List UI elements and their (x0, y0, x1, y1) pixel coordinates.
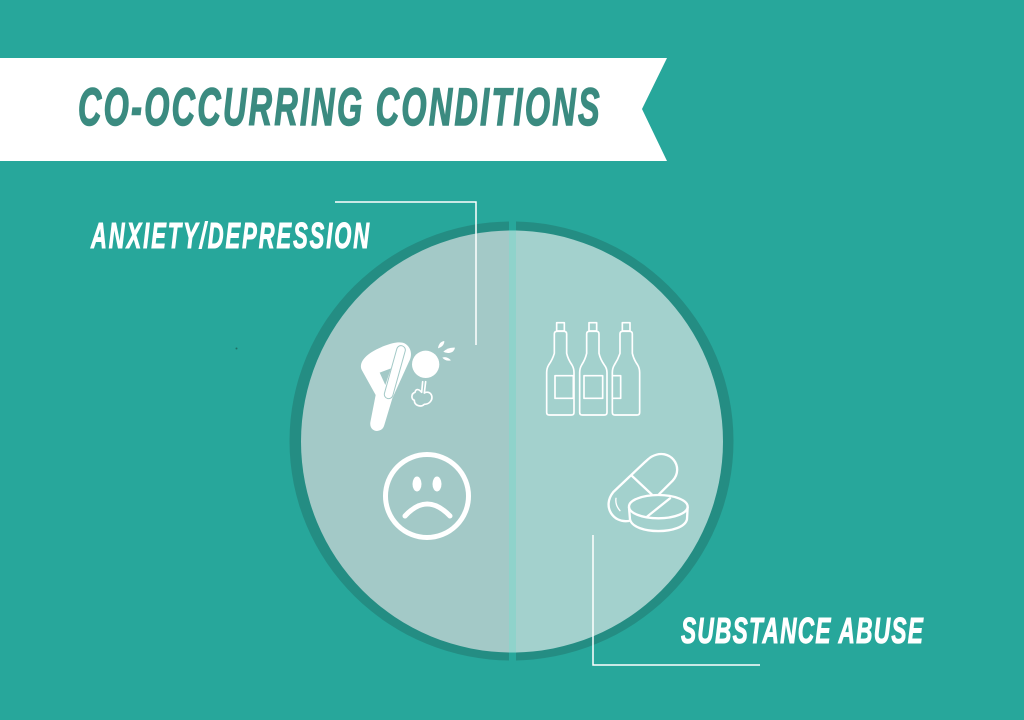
title banner (0, 58, 667, 161)
stray dot (236, 348, 238, 350)
icon: capsule and tablet (609, 454, 688, 531)
substance abuse connector line (593, 535, 760, 665)
right half: substance abuse (516, 230, 723, 652)
title: CO-OCCURRING CONDITIONS (78, 78, 600, 137)
centre divider (509, 230, 516, 652)
left half: anxiety/depression (301, 230, 509, 652)
label: substance abuse: SUBSTANCE ABUSE (681, 612, 924, 651)
icon: person bent over with nausea (361, 341, 455, 431)
label: anxiety/depression: ANXIETY/DEPRESSION (90, 217, 370, 256)
anxiety connector line (335, 202, 476, 345)
icon: three bottles (547, 323, 640, 415)
outer ring left (290, 222, 509, 660)
bottle 1 (547, 323, 574, 415)
bottle 2 (580, 323, 607, 415)
bottle 3 (612, 323, 640, 415)
outer ring right (516, 222, 734, 660)
icon: sad face (386, 454, 468, 538)
circle diagram (290, 222, 734, 660)
